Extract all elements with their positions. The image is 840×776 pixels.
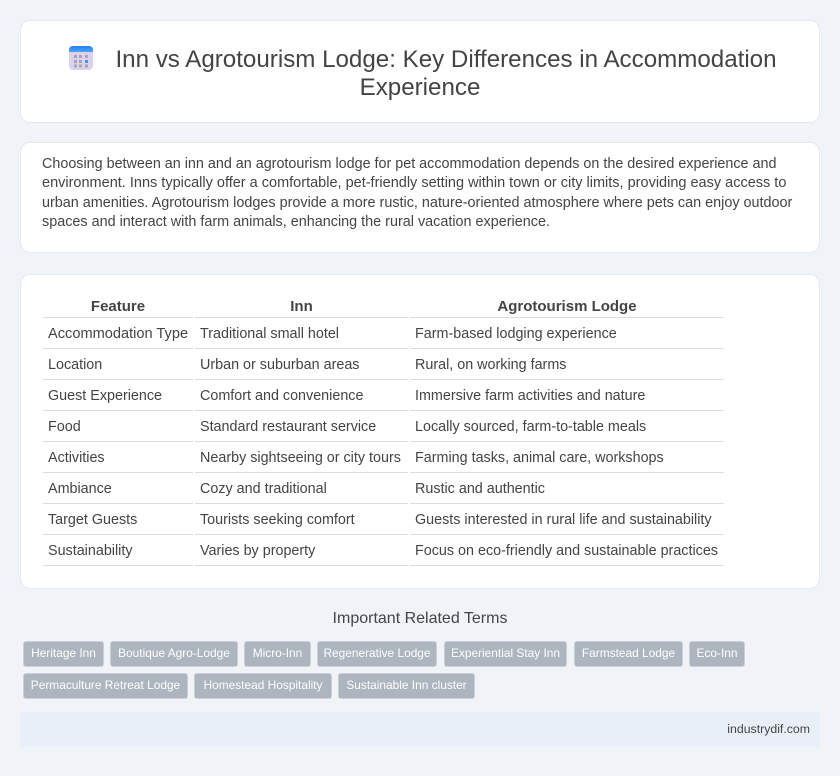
comparison table: Farming tasks, animal care, workshops xyxy=(415,450,664,466)
footer source: industrydif.com xyxy=(727,722,810,736)
comparison table: Activities xyxy=(48,450,105,466)
tag: Heritage Inn xyxy=(31,646,96,660)
comparison table: Urban or suburban areas xyxy=(200,357,359,373)
tag: Farmstead Lodge xyxy=(582,646,675,660)
comparison table: Sustainability xyxy=(48,543,133,559)
intro text: spaces and interact with farm animals, enhancing the rural vacation experience. xyxy=(42,214,550,230)
comparison table: Rural, on working farms xyxy=(415,357,566,373)
intro text: urban amenities. Agrotourism lodges provide a more rustic, nature-oriented atmosphere where pets can enjoy outdoor xyxy=(42,195,792,211)
icon: calendar xyxy=(69,46,93,70)
comparison table: Locally sourced, farm-to-table meals xyxy=(415,419,646,435)
title: Inn vs Agrotourism Lodge: Key Differences in Accommodation xyxy=(115,46,777,73)
intro text: Choosing between an inn and an agrotourism lodge for pet accommodation depends on the desired experience and xyxy=(42,156,776,172)
comparison table xyxy=(43,298,724,566)
tag xyxy=(444,641,567,667)
comparison table: Varies by property xyxy=(200,543,315,559)
comparison table: Location xyxy=(48,357,102,373)
tag xyxy=(574,641,683,667)
comparison table: Rustic and authentic xyxy=(415,481,545,497)
tag: Permaculture Retreat Lodge xyxy=(31,678,180,692)
intro text xyxy=(42,156,792,230)
related term tags xyxy=(23,641,745,699)
table header: Feature xyxy=(91,298,145,315)
tag: Experiential Stay Inn xyxy=(451,646,560,660)
comparison table: Standard restaurant service xyxy=(200,419,376,435)
panel: comparison table xyxy=(20,274,820,589)
tag xyxy=(23,641,104,667)
table header xyxy=(91,298,637,315)
tag xyxy=(317,641,437,667)
tag: Eco-Inn xyxy=(696,646,737,660)
tag xyxy=(110,641,238,667)
comparison table: Food xyxy=(48,419,81,435)
panel: header xyxy=(20,20,820,123)
comparison table: Comfort and convenience xyxy=(200,388,363,404)
tag xyxy=(244,641,311,667)
tag: Regenerative Lodge xyxy=(323,646,431,660)
comparison table: Farm-based lodging experience xyxy=(415,326,617,342)
tag: Micro-Inn xyxy=(253,646,302,660)
intro text: environment. Inns typically offer a comfortable, pet-friendly setting within town or city limits, providing easy access to xyxy=(42,175,786,191)
tag xyxy=(194,673,332,699)
footer bar xyxy=(20,712,820,746)
tag xyxy=(338,673,475,699)
tag: Sustainable Inn cluster xyxy=(346,678,467,692)
comparison table: Ambiance xyxy=(48,481,112,497)
comparison table: Accommodation Type xyxy=(48,326,188,342)
comparison table: Focus on eco-friendly and sustainable practices xyxy=(415,543,718,559)
tag xyxy=(23,673,188,699)
comparison table: Target Guests xyxy=(48,512,137,528)
comparison table: Traditional small hotel xyxy=(200,326,339,342)
comparison table: Guests interested in rural life and sustainability xyxy=(415,512,712,528)
comparison table: Cozy and traditional xyxy=(200,481,327,497)
tag: Homestead Hospitality xyxy=(204,678,322,692)
heading: related terms: Important Related Terms xyxy=(333,610,507,627)
comparison table: Immersive farm activities and nature xyxy=(415,388,645,404)
comparison table: Guest Experience xyxy=(48,388,162,404)
comparison table: Nearby sightseeing or city tours xyxy=(200,450,401,466)
panel: introduction xyxy=(20,142,820,253)
tag: Boutique Agro-Lodge xyxy=(118,646,230,660)
title second line: Experience xyxy=(360,74,480,101)
table header: Agrotourism Lodge xyxy=(497,298,637,315)
tag xyxy=(689,641,745,667)
table header: Inn xyxy=(290,298,313,315)
comparison table: Tourists seeking comfort xyxy=(200,512,355,528)
